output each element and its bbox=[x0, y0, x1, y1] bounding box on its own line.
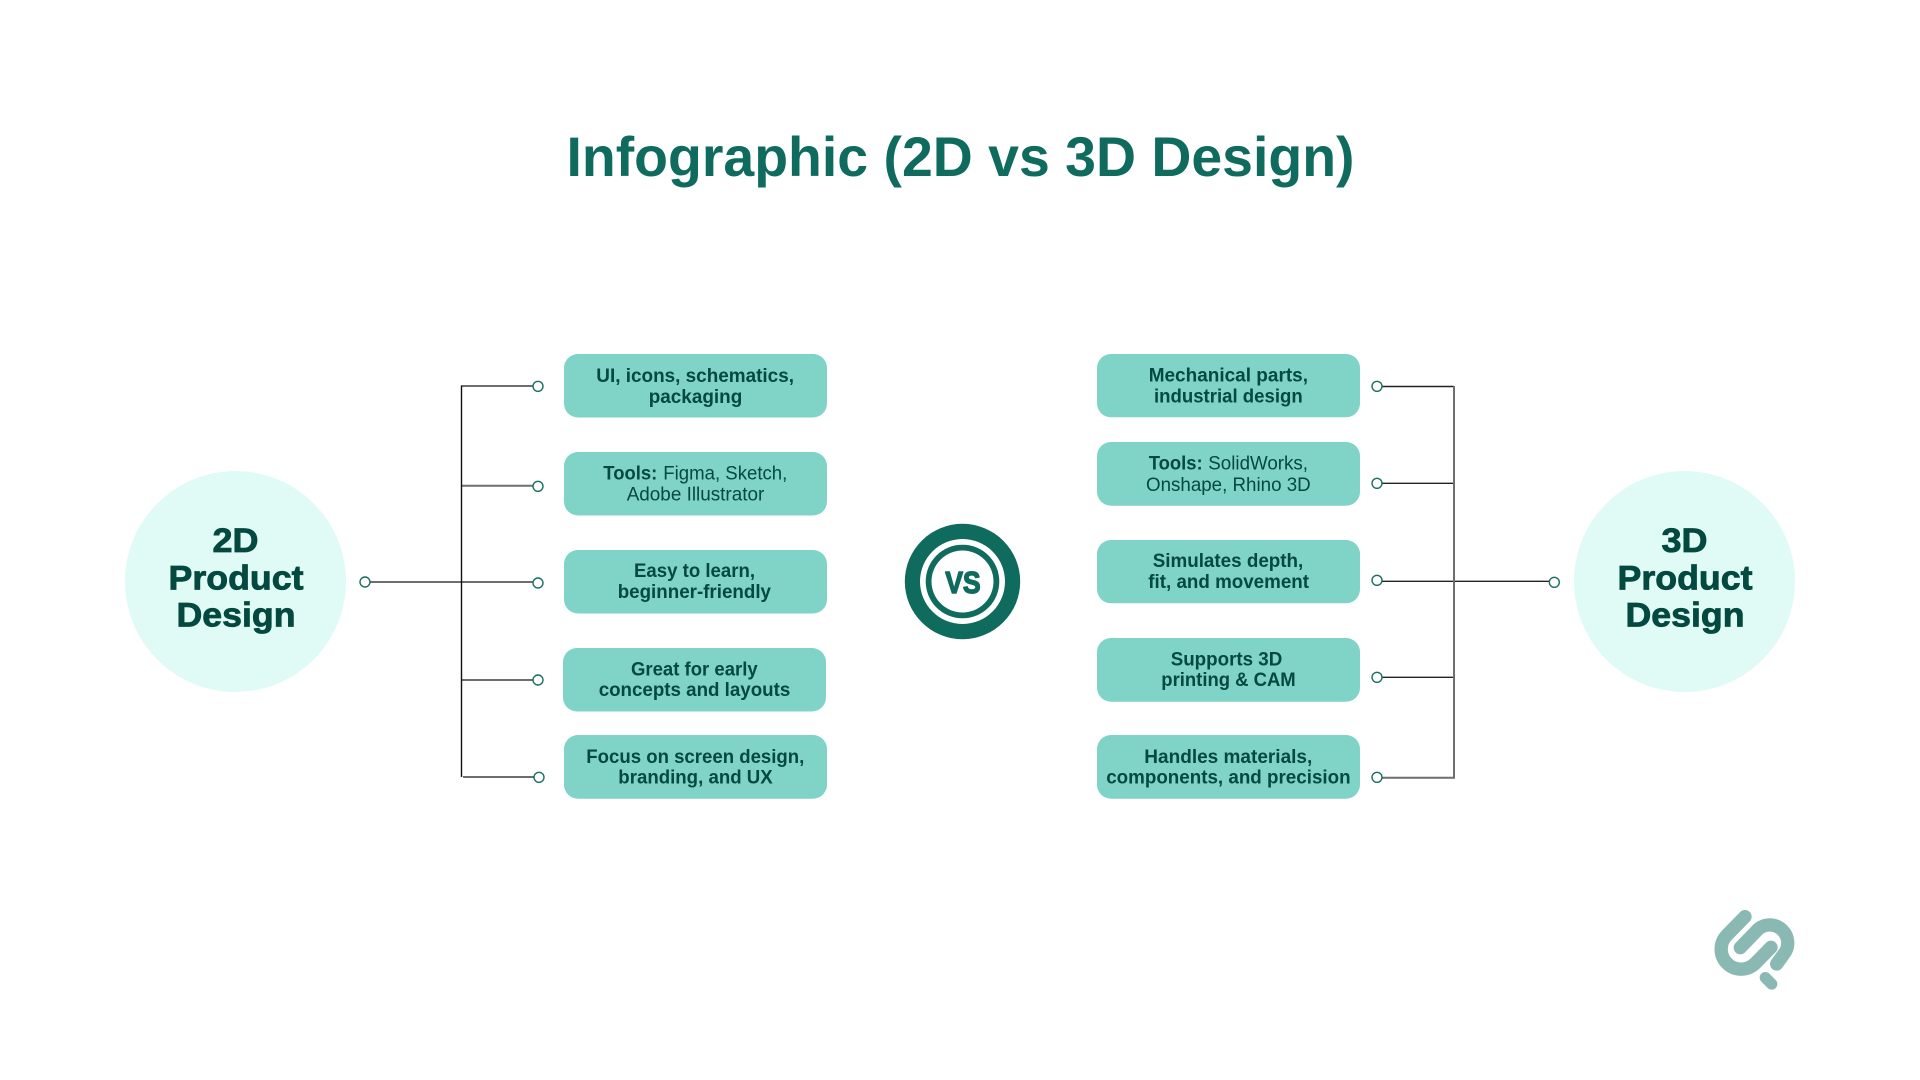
panel: 3D list bbox=[1097, 354, 1360, 799]
item: 2D tools: Adobe Illustrator bbox=[627, 484, 765, 506]
item: 2D tools bbox=[564, 452, 827, 516]
icon: logo bbox=[1721, 917, 1788, 984]
item: Great for early: Great for early bbox=[631, 658, 758, 680]
connector: 2D tree bbox=[360, 381, 544, 782]
item: Supports 3D bbox=[1097, 638, 1360, 702]
panel: 2D product design circle: 2D bbox=[212, 522, 258, 560]
item: Handles materials: components, and precision bbox=[1106, 766, 1351, 788]
item: Great for early: concepts and layouts bbox=[599, 679, 790, 701]
item: Mechanical parts: industrial design bbox=[1154, 386, 1303, 408]
item: 2D tools: Tools: bbox=[603, 462, 657, 484]
panel: 2D product design circle: Design bbox=[176, 596, 296, 634]
item: Simulates depth: fit, and movement bbox=[1148, 571, 1309, 593]
item: 3D tools: Onshape, Rhino 3D bbox=[1146, 474, 1311, 496]
item: Supports 3D: Supports 3D bbox=[1171, 648, 1282, 670]
item: UI, icons: packaging bbox=[649, 386, 742, 408]
title: Infographic (2D vs 3D Design) bbox=[566, 125, 1354, 188]
item: UI, icons bbox=[564, 354, 827, 418]
item: Great for early bbox=[563, 648, 826, 712]
item: UI, icons: UI, icons, schematics, bbox=[596, 365, 794, 387]
icon: VS badge: VS bbox=[945, 565, 981, 600]
panel: 3D product design circle: Design bbox=[1626, 596, 1744, 634]
panel: 3D product design circle bbox=[1574, 471, 1795, 692]
item: Simulates depth bbox=[1097, 540, 1360, 603]
panel: 2D product design circle: Product bbox=[168, 559, 304, 597]
panel: 3D product design circle: Product bbox=[1618, 559, 1752, 597]
item: Easy to learn: Easy to learn, bbox=[634, 560, 755, 582]
item: 3D tools: Tools: bbox=[1149, 452, 1203, 474]
panel: 2D product design circle bbox=[125, 471, 346, 692]
item: Easy to learn: beginner-friendly bbox=[618, 581, 771, 603]
panel: 2D list bbox=[563, 354, 827, 799]
item: Simulates depth: Simulates depth, bbox=[1153, 550, 1303, 572]
item: Mechanical parts bbox=[1097, 354, 1360, 417]
item: Supports 3D: printing & CAM bbox=[1161, 669, 1296, 691]
item: Easy to learn bbox=[564, 550, 827, 614]
item: Focus on screen design: Focus on screen design, bbox=[586, 746, 804, 768]
connector: 3D tree bbox=[1372, 381, 1559, 782]
item: 3D tools: SolidWorks, bbox=[1208, 452, 1308, 474]
item: 2D tools: Figma, Sketch, bbox=[663, 462, 787, 484]
panel: 3D product design circle: 3D bbox=[1662, 522, 1708, 560]
item: Mechanical parts: Mechanical parts, bbox=[1149, 364, 1308, 386]
item: Handles materials: Handles materials, bbox=[1144, 746, 1312, 768]
icon: VS badge bbox=[905, 524, 1020, 639]
item: 3D tools bbox=[1097, 442, 1360, 506]
item: Handles materials bbox=[1097, 735, 1360, 799]
item: Focus on screen design: branding, and UX bbox=[618, 766, 773, 788]
item: Focus on screen design bbox=[564, 735, 827, 799]
